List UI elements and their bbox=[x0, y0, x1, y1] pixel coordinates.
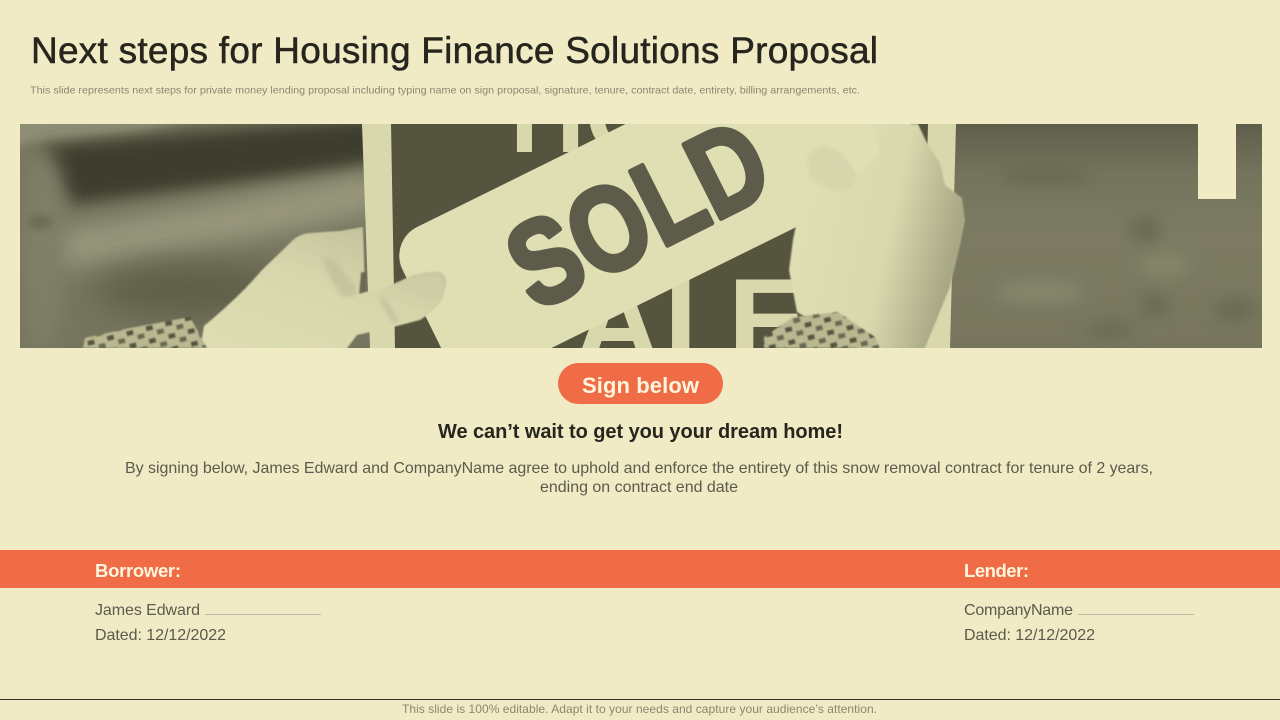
white cutout block on photo bbox=[1198, 124, 1236, 199]
for-sale board bbox=[362, 124, 956, 348]
borrower signature block: Dated: 12/12/2022 bbox=[95, 627, 226, 644]
subtitle: This slide represents next steps for private money lending proposal including typing name on sign proposal, signature, tenure, contract date, entirety, billing arrangements, etc. bbox=[30, 84, 860, 96]
photo background: blurred left side bbox=[20, 124, 370, 348]
lender heading: Lender: bbox=[964, 560, 1029, 581]
photo: hands holding a SOLD sign bbox=[20, 124, 1262, 382]
agreement paragraph: ending on contract end date bbox=[540, 479, 738, 496]
right hand bbox=[789, 124, 965, 360]
borrower signature block: James Edward bbox=[95, 602, 200, 619]
footer: This slide is 100% editable. Adapt it to your needs and capture your audience’s attention. bbox=[402, 702, 877, 716]
lender signature block: CompanyName bbox=[964, 602, 1073, 619]
borrower heading: Borrower: bbox=[95, 560, 181, 581]
lender signature block bbox=[964, 602, 1194, 644]
button: Sign below bbox=[558, 363, 723, 404]
for-sale board: ALE bbox=[574, 254, 808, 388]
left sleeve cuff bbox=[83, 317, 207, 348]
agreement paragraph: By signing below, James Edward and CompanyName agree to uphold and enforce the entirety of this snow removal contract for tenure of 2 years, bbox=[125, 460, 1153, 477]
orange signature band bbox=[0, 550, 1280, 588]
borrower signature block bbox=[95, 602, 321, 644]
photo background: blurred right side bbox=[945, 124, 1262, 348]
right sleeve cuff bbox=[764, 312, 880, 348]
left hand bbox=[198, 227, 446, 360]
SOLD plate: SOLD bbox=[486, 93, 790, 335]
SOLD plate bbox=[399, 124, 911, 348]
title: Next steps for Housing Finance Solutions Proposal bbox=[31, 30, 878, 71]
for-sale board: HO bbox=[510, 59, 666, 175]
button: Sign below: Sign below bbox=[582, 373, 700, 398]
agreement paragraph bbox=[125, 460, 1153, 496]
heading: dream home: We can’t wait to get you your dream home! bbox=[438, 421, 843, 443]
lender signature block: Dated: 12/12/2022 bbox=[964, 627, 1095, 644]
